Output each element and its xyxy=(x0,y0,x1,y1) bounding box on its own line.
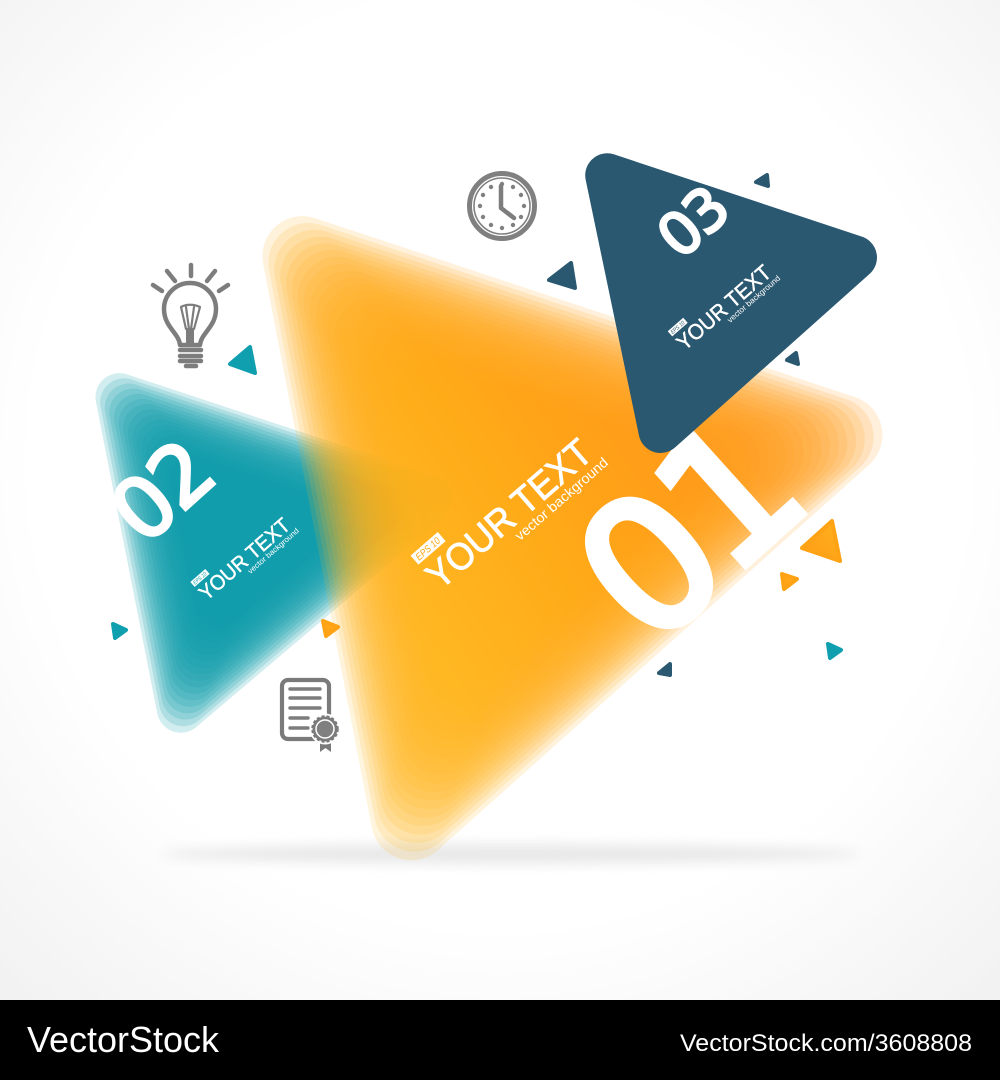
small triangle: dark under 03 xyxy=(787,353,798,364)
panel: teal triangle 02 xyxy=(119,397,428,709)
label: dark your text: EPS 10 xyxy=(670,320,687,336)
label: teal your text: vector background xyxy=(246,526,301,576)
panel: orange triangle 01 xyxy=(302,256,842,820)
footer bar xyxy=(0,1000,1000,1080)
small triangle: dark by clock xyxy=(549,263,575,288)
icon: clock xyxy=(470,174,534,238)
label: orange your text: YOUR TEXT xyxy=(418,432,601,598)
small triangle: dark top right xyxy=(756,175,768,186)
label: dark your text: vector background xyxy=(726,274,782,325)
icon: light bulb xyxy=(153,265,228,366)
small triangle: orange by 02 xyxy=(323,621,338,636)
small triangle: teal by bulb xyxy=(230,347,255,373)
number 01: 01 xyxy=(537,384,836,683)
number 03: 03 xyxy=(644,174,741,272)
label: teal your text: EPS 10 xyxy=(192,571,209,586)
footer logo: VectorStock xyxy=(27,1019,220,1060)
small triangle: dark bottom xyxy=(659,664,670,675)
small triangle: large orange xyxy=(802,521,840,561)
small triangle: orange under 01 xyxy=(782,574,797,589)
ground shadow xyxy=(160,844,860,864)
footer url: VectorStock.com/3608808 xyxy=(680,1030,972,1057)
label: orange your text: vector background xyxy=(512,454,611,544)
small triangle: teal right xyxy=(828,644,841,658)
label: teal your text: YOUR TEXT xyxy=(195,514,295,605)
small triangle: teal left xyxy=(113,624,126,638)
label: orange your text: EPS 10 xyxy=(414,536,443,563)
label: dark your text: YOUR TEXT xyxy=(671,260,776,355)
number 02: 02 xyxy=(92,423,231,562)
icon: certificate xyxy=(282,680,340,752)
panel: dark blue triangle 03 xyxy=(607,175,855,431)
